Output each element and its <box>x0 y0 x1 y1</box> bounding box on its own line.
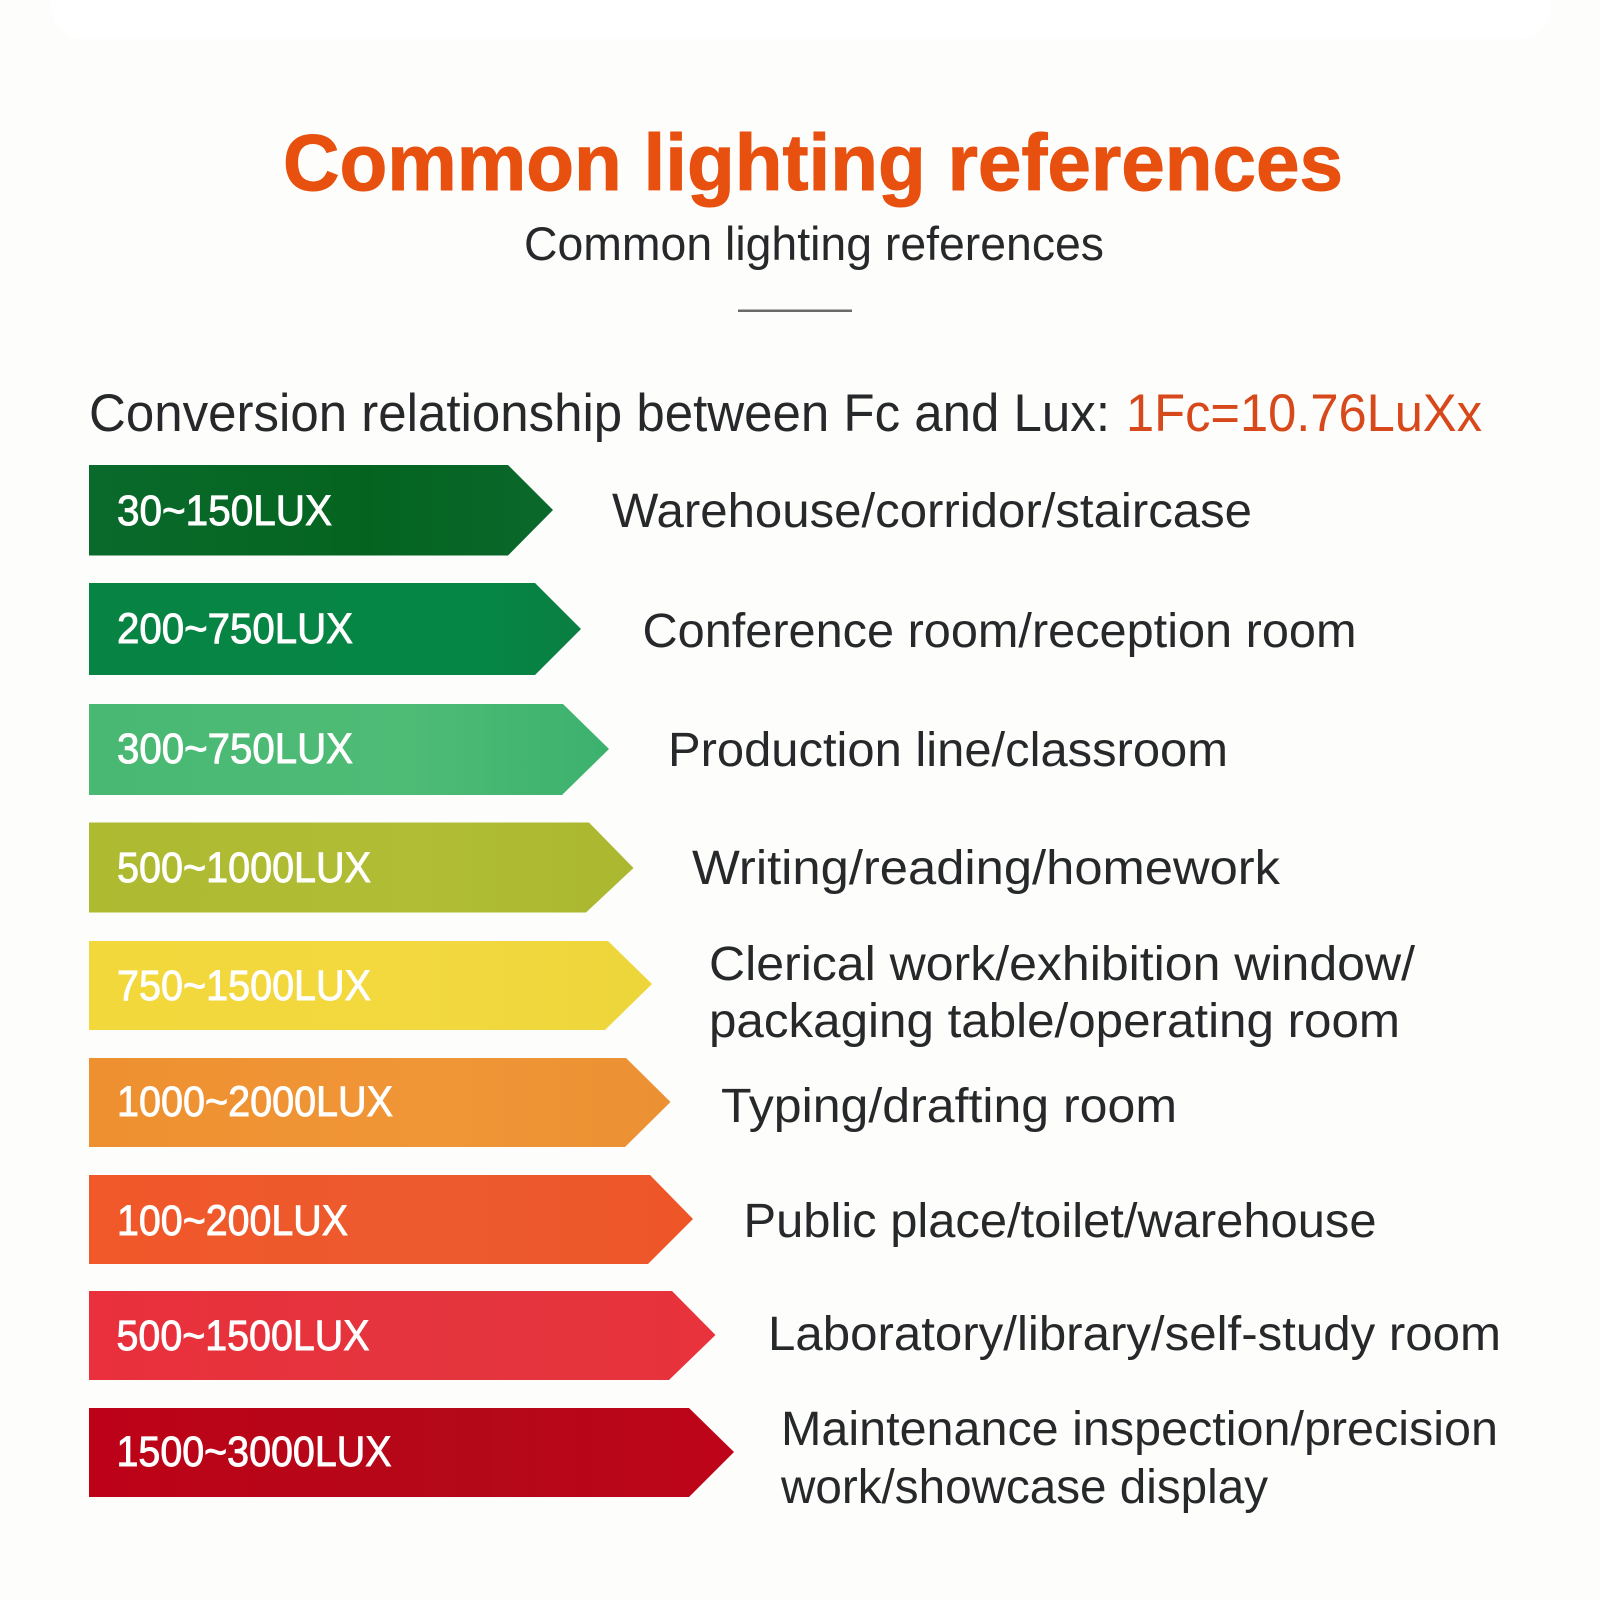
row: 500~1500LUX laboratory <box>89 1291 1501 1380</box>
row: 100~200LUX public place: 100~200LUX <box>117 1197 348 1245</box>
row: 30~150LUX warehouse: 30~150LUX <box>117 487 332 535</box>
top white card <box>51 0 1551 39</box>
row: 500~1500LUX laboratory: 500~1500LUX <box>116 1312 370 1360</box>
row: 1500~3000LUX maintenance <box>89 1403 1498 1514</box>
title: Common lighting references <box>283 118 1343 207</box>
row: 100~200LUX public place: Public place/toilet/warehouse <box>744 1195 1376 1248</box>
conversion relationship line: 1Fc=10.76LuXx <box>1126 384 1482 443</box>
row: 1500~3000LUX maintenance: 1500~3000LUX <box>116 1428 392 1476</box>
row: 200~750LUX conference room: 200~750LUX <box>117 605 353 653</box>
row: 1000~2000LUX typing <box>89 1058 1177 1147</box>
row: 750~1500LUX clerical work: Clerical work/exhibition window/ <box>709 938 1416 991</box>
row: 30~150LUX warehouse: Warehouse/corridor/staircase <box>612 485 1252 538</box>
row: 100~200LUX public place <box>89 1175 1376 1264</box>
row: 500~1000LUX writing <box>89 822 1281 912</box>
row: 300~750LUX production line <box>89 704 1228 795</box>
row: 200~750LUX conference room <box>89 583 1356 675</box>
row: 1500~3000LUX maintenance: Maintenance inspection/precision <box>781 1403 1498 1456</box>
row: 200~750LUX conference room: Conference room/reception room <box>642 605 1356 658</box>
conversion relationship line: Conversion relationship between Fc and Lux: <box>89 384 1110 443</box>
row: 300~750LUX production line: 300~750LUX <box>117 725 353 773</box>
row: 750~1500LUX clerical work: packaging table/operating room <box>709 995 1400 1048</box>
row: 500~1000LUX writing: Writing/reading/homework <box>692 842 1281 895</box>
row: 500~1500LUX laboratory: Laboratory/library/self-study room <box>768 1308 1501 1361</box>
row: 750~1500LUX clerical work <box>89 938 1416 1048</box>
row: 1500~3000LUX maintenance: work/showcase display <box>780 1461 1268 1514</box>
row: 500~1000LUX writing: 500~1000LUX <box>117 844 371 892</box>
row: 1000~2000LUX typing: Typing/drafting room <box>721 1080 1177 1133</box>
row: 1000~2000LUX typing: 1000~2000LUX <box>117 1078 393 1126</box>
row: 750~1500LUX clerical work: 750~1500LUX <box>117 962 371 1010</box>
row: 300~750LUX production line: Production line/classroom <box>668 724 1228 777</box>
row: 30~150LUX warehouse <box>89 465 1252 556</box>
subtitle: Common lighting references <box>524 217 1104 270</box>
